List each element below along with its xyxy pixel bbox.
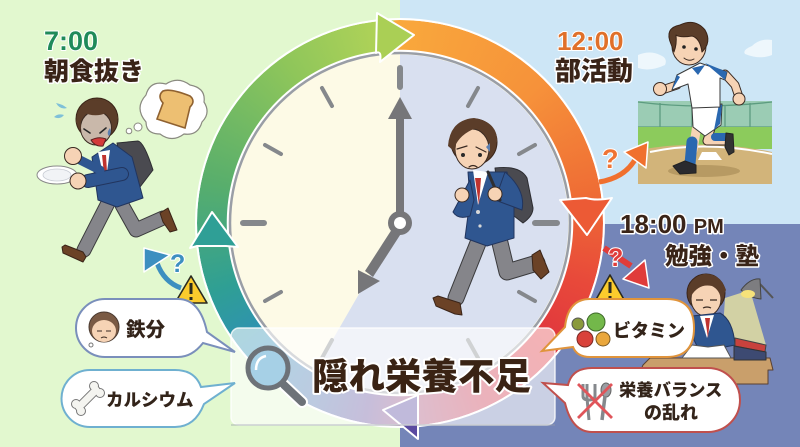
icon: warning right	[594, 275, 626, 303]
bubble: vitamin	[542, 299, 694, 357]
arrowhead: orange right	[560, 198, 612, 235]
background: morning green	[0, 0, 400, 447]
bubble: iron	[76, 299, 235, 357]
icon: bone	[72, 382, 104, 416]
boy: tired center	[433, 118, 549, 315]
icon: red arrow	[604, 248, 631, 266]
lamp	[741, 279, 761, 299]
label: 栄養バランス	[619, 380, 722, 400]
question mark red: ?	[608, 244, 623, 272]
arrowhead: purple bottom	[383, 395, 418, 439]
icon: blue arrow	[157, 263, 181, 288]
cloud left	[638, 52, 666, 69]
panel: hidden malnutrition title	[231, 328, 555, 425]
cycle ring gradient	[197, 20, 603, 426]
scene: baseball field	[638, 40, 772, 184]
icon: pale face	[89, 312, 119, 347]
background: evening indigo	[400, 224, 800, 447]
label: の乱れ	[644, 402, 698, 423]
label: 朝食抜き: 朝食抜き	[44, 58, 144, 86]
question mark orange: ?	[602, 144, 618, 174]
scene: studying desk	[640, 274, 773, 384]
icon: warning left	[175, 276, 207, 303]
lamp light	[722, 290, 766, 345]
icon: magnifier	[246, 346, 302, 402]
label: 鉄分	[126, 318, 166, 341]
label: 部活動: 部活動	[555, 56, 633, 86]
runner: baseball player	[654, 22, 745, 174]
label: ビタミン	[613, 320, 685, 341]
arrowhead: teal left	[190, 212, 238, 248]
icon: crossed cutlery	[578, 383, 612, 420]
title text: 隠れ栄養不足	[312, 356, 531, 397]
icon: orange arrow	[599, 158, 636, 182]
cloud right	[744, 40, 772, 57]
label: カルシウム	[106, 390, 194, 410]
bubble: nutrition balance	[543, 368, 740, 432]
time label: 18:00 PM: 18:00 PM	[620, 209, 724, 239]
ring white outline	[195, 18, 605, 428]
thought bubble: toast	[126, 80, 207, 138]
clock	[230, 53, 570, 393]
boy: running late with plate	[37, 98, 177, 262]
time label: 7:00: 7:00	[44, 26, 98, 56]
label: 勉強・塾: 勉強・塾	[665, 243, 759, 269]
clock hands	[358, 97, 412, 294]
time label: 12:00: 12:00	[557, 26, 624, 56]
icon: fruits	[572, 313, 610, 347]
bubble: calcium	[62, 370, 235, 427]
arrowhead: green top	[376, 13, 414, 62]
question mark blue: ?	[170, 250, 185, 278]
background: noon blue	[400, 0, 800, 224]
icon: toast	[157, 90, 193, 128]
